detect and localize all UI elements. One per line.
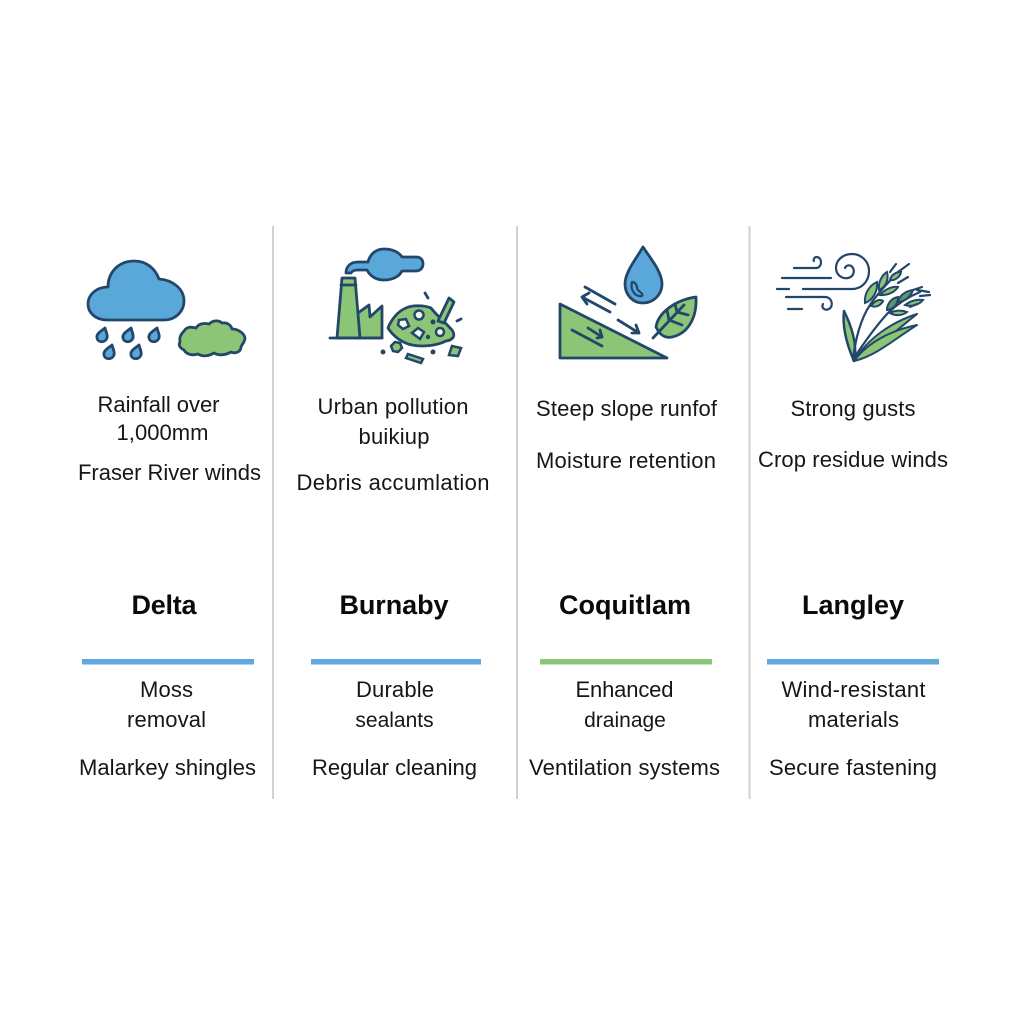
text: Burnaby solutions: Durable [356,677,434,702]
text: Burnaby causes: buikiup [358,424,430,449]
text: Langley causes: Crop residue winds [758,447,948,472]
text: Delta solutions [79,677,256,780]
panel: Coquitlam [529,247,720,780]
text: Burnaby causes: Debris accumlation [296,470,490,495]
heading: Delta: Delta [132,590,197,620]
heading: Coquitlam: Coquitlam [559,590,691,620]
bar: Delta [82,659,254,664]
text: Delta solutions: removal [127,707,206,732]
text: Delta solutions: Malarkey shingles [79,755,256,780]
text: Burnaby causes: Urban pollution [318,394,468,419]
icon: slope, water drop and leaf [560,247,696,358]
bar: Coquitlam [540,659,712,664]
heading: Burnaby: Burnaby [340,590,448,620]
text: Delta causes: 1,000mm [116,420,208,445]
bar: Burnaby [311,659,481,664]
text: Coquitlam causes: Steep slope runfof [536,396,718,421]
text: Burnaby solutions [312,677,477,780]
text: Langley causes: Strong gusts [790,396,916,421]
text: Langley solutions: Secure fastening [769,755,937,780]
panel: Langley [758,254,948,780]
text: Coquitlam causes [536,396,718,473]
text: Coquitlam solutions: Ventilation systems [529,755,720,780]
text: Delta causes: Fraser River winds [78,460,261,485]
text: Coquitlam solutions: Enhanced [576,677,674,702]
icon: wind and wheat [777,254,930,361]
text: Langley solutions: Wind-resistant [782,677,926,702]
heading: Langley: Langley [802,590,904,620]
icon: factory and debris pile [330,249,461,363]
text: Delta causes: Rainfall over [98,392,220,417]
text: Delta solutions: Moss [140,677,193,702]
text: Burnaby solutions: Regular cleaning [312,755,477,780]
panel: Burnaby [296,249,490,780]
text: Burnaby solutions: sealants [355,709,434,732]
text: Coquitlam causes: Moisture retention [536,448,716,473]
text: Langley solutions [769,677,937,780]
text: Coquitlam solutions: drainage [584,709,666,732]
text: Langley solutions: materials [808,707,899,732]
icon: rain cloud and moss [88,261,245,359]
text: Coquitlam solutions [529,677,720,780]
text: Langley causes [758,396,948,472]
text: Burnaby causes [296,394,490,495]
panel: Delta [78,261,261,780]
bar: Langley [767,659,939,664]
text: Delta causes [78,392,261,485]
